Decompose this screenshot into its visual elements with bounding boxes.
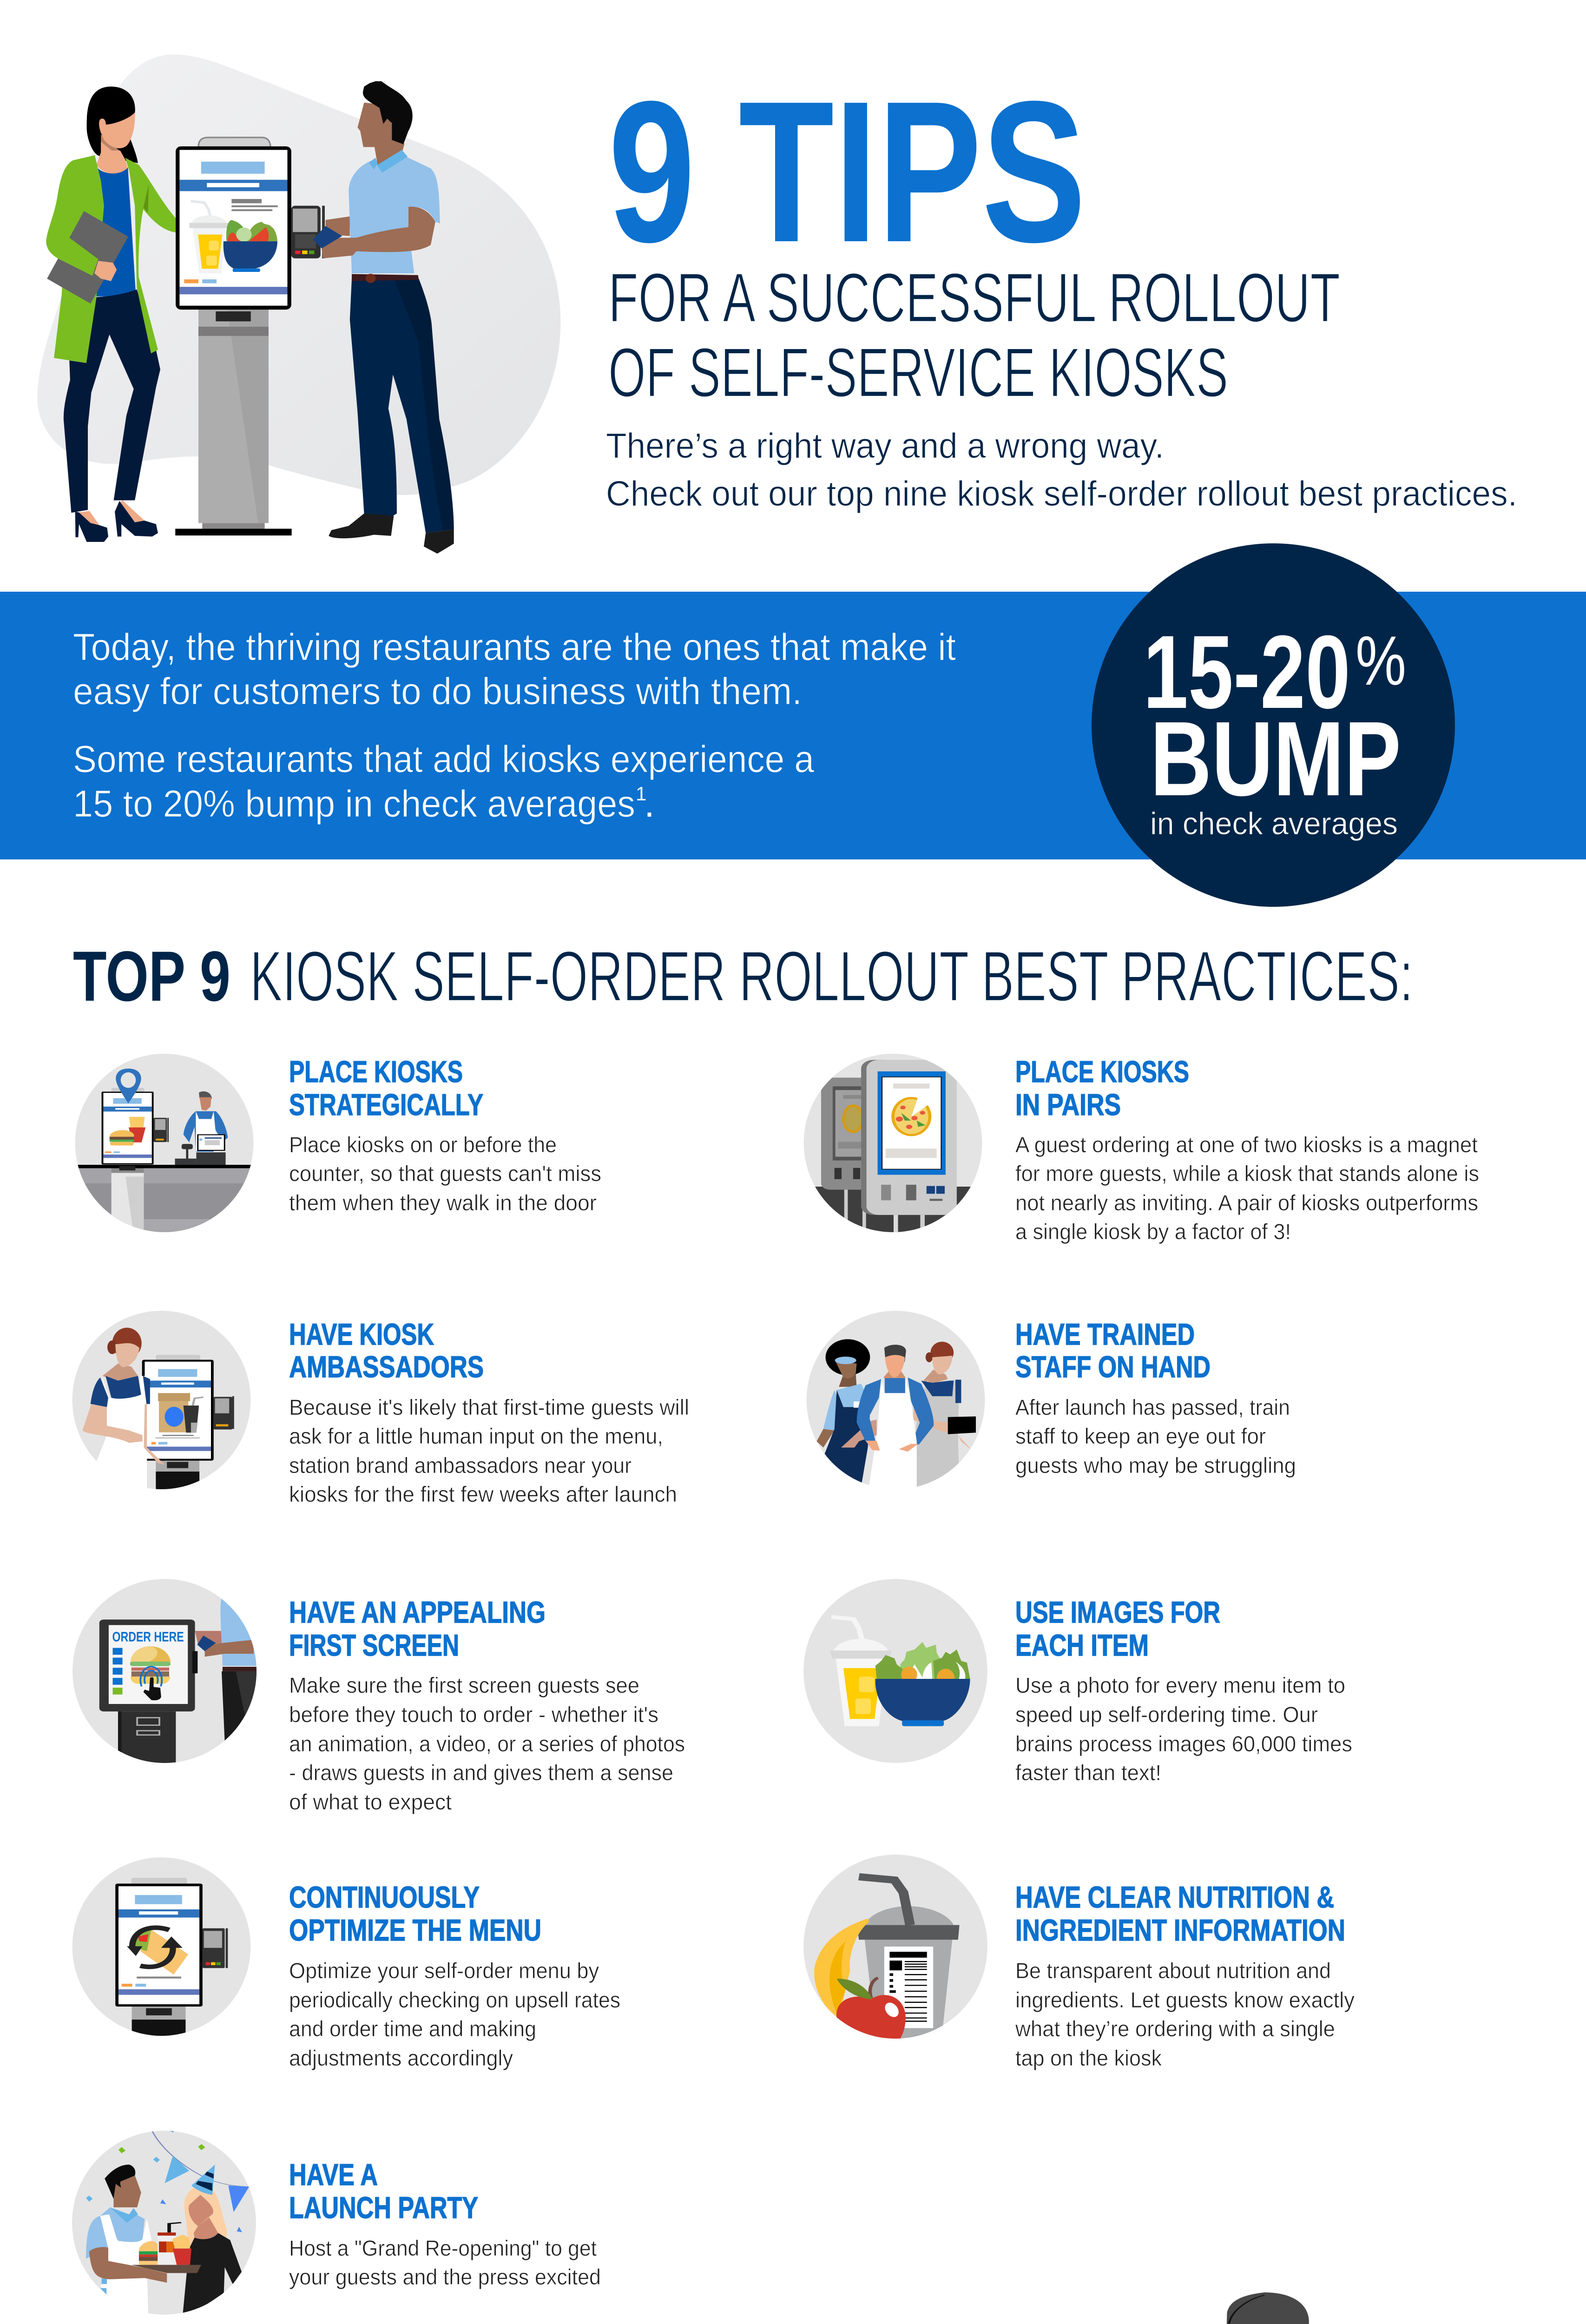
- text block: use images for each item: USE IMAGES FOR: [1015, 1595, 1220, 1629]
- text block: have trained staff on hand: staff to keep an eye out for: [1015, 1424, 1266, 1448]
- text block: continuously optimize the menu: adjustments accordingly: [289, 2046, 513, 2070]
- text block: place kiosks strategically: them when they walk in the door: [289, 1190, 597, 1215]
- icon: drink and salad: [803, 1579, 987, 1763]
- icon: optimize the menu: [72, 1857, 251, 2039]
- text block: continuously optimize the menu: and order time and making: [289, 2016, 536, 2041]
- headline: 9 tips: 9 TIPS: [608, 59, 1086, 284]
- text block: use images for each item: brains process images 60,000 times: [1015, 1731, 1352, 1756]
- text block: have a launch party: Host a "Grand Re-opening" to get: [289, 2236, 597, 2260]
- section heading: TOP 9: [73, 937, 230, 1016]
- text block: have trained staff on hand: After launch has passed, train: [1015, 1395, 1290, 1419]
- text block: continuously optimize the menu: periodically checking on upsell rates: [289, 1987, 620, 2012]
- text block: use images for each item: Use a photo for every menu item to: [1015, 1673, 1345, 1697]
- callout: 15-20% bump circle: %: [1356, 621, 1406, 700]
- text block: have a launch party: your guests and the press excited: [289, 2265, 601, 2289]
- payment card reader: [291, 206, 325, 258]
- callout: 15-20% bump circle: [1092, 543, 1455, 907]
- self-order kiosk: [175, 138, 292, 535]
- text block: have an appealing first screen: FIRST SCREEN: [289, 1628, 459, 1662]
- intro text: [606, 426, 1517, 514]
- subtitle: [608, 258, 1340, 411]
- intro text: Check out our top nine kiosk self-order rollout best practices.: [606, 474, 1517, 514]
- icon: launch party: [72, 2130, 256, 2317]
- text block: have kiosk ambassadors: kiosks for the first few weeks after launch: [289, 1482, 677, 1506]
- text block: have a launch party: [289, 2158, 601, 2289]
- band text: .: [644, 783, 655, 825]
- icon: appealing first screen: ORDER HERE: [112, 1629, 184, 1644]
- band text: easy for customers to do business with them.: [73, 670, 802, 713]
- text block: have clear nutrition and ingredient information: HAVE CLEAR NUTRITION &: [1015, 1880, 1334, 1914]
- text block: have an appealing first screen: an animation, a video, or a series of photos: [289, 1731, 685, 1756]
- icon: trained staff: [807, 1311, 985, 1494]
- text block: place kiosks in pairs: A guest ordering at one of two kiosks is a magnet: [1015, 1132, 1478, 1157]
- text block: have an appealing first screen: HAVE AN APPEALING: [289, 1595, 546, 1629]
- text block: place kiosks in pairs: PLACE KIOSKS: [1015, 1055, 1189, 1089]
- band text: Today, the thriving restaurants are the ones that make it: [73, 626, 956, 668]
- icon: place kiosks in pairs: [799, 1054, 986, 1235]
- icon: nutrition label on cup with fruit: [803, 1855, 987, 2042]
- text block: have a launch party: LAUNCH PARTY: [289, 2191, 478, 2225]
- title: [606, 59, 1517, 514]
- text block: have clear nutrition and ingredient information: INGREDIENT INFORMATION: [1015, 1913, 1345, 1947]
- band text: 1: [636, 783, 646, 805]
- text block: have trained staff on hand: HAVE TRAINED: [1015, 1317, 1195, 1351]
- text block: continuously optimize the menu: Optimize your self-order menu by: [289, 1958, 599, 1983]
- text block: have kiosk ambassadors: [289, 1317, 689, 1506]
- band text: [73, 626, 956, 825]
- text block: continuously optimize the menu: [289, 1880, 620, 2070]
- callout: 15-20% bump circle: 15-20: [1143, 614, 1350, 730]
- text block: have kiosk ambassadors: Because it's likely that first-time guests will: [289, 1395, 689, 1419]
- text block: place kiosks strategically: Place kiosks on or before the: [289, 1132, 557, 1157]
- text block: have kiosk ambassadors: HAVE KIOSK: [289, 1317, 434, 1351]
- text block: place kiosks strategically: STRATEGICALLY: [289, 1088, 483, 1122]
- text block: have an appealing first screen: - draws guests in and gives them a sense: [289, 1760, 673, 1785]
- text block: place kiosks in pairs: [1015, 1055, 1479, 1244]
- text block: place kiosks in pairs: IN PAIRS: [1015, 1088, 1121, 1122]
- text block: have kiosk ambassadors: AMBASSADORS: [289, 1350, 484, 1384]
- text block: use images for each item: [1015, 1595, 1352, 1785]
- panel: blue statistic band: [0, 592, 1586, 859]
- icon: appealing first screen: [72, 1579, 260, 1767]
- band text: Some restaurants that add kiosks experience a: [73, 738, 814, 780]
- callout: 15-20% bump circle: in check averages: [1150, 806, 1398, 841]
- text block: have clear nutrition and ingredient information: tap on the kiosk: [1015, 2046, 1162, 2070]
- text block: have trained staff on hand: [1015, 1317, 1296, 1478]
- text block: place kiosks in pairs: not nearly as inviting. A pair of kiosks outperforms: [1015, 1190, 1478, 1215]
- text block: have an appealing first screen: Make sure the first screen guests see: [289, 1673, 639, 1697]
- text block: have clear nutrition and ingredient information: what they’re ordering with a single: [1015, 2016, 1335, 2041]
- text block: place kiosks strategically: [289, 1055, 601, 1215]
- text block: have clear nutrition and ingredient information: ingredients. Let guests know exactly: [1015, 1987, 1355, 2012]
- text block: have clear nutrition and ingredient information: [1015, 1880, 1355, 2070]
- subtitle: OF SELF-SERVICE KIOSKS: [608, 333, 1228, 411]
- background blob: [37, 54, 560, 495]
- text block: use images for each item: faster than text!: [1015, 1760, 1161, 1785]
- text block: place kiosks in pairs: a single kiosk by a factor of 3!: [1015, 1219, 1291, 1244]
- intro text: There’s a right way and a wrong way.: [606, 426, 1164, 466]
- text block: have kiosk ambassadors: station brand ambassadors near your: [289, 1453, 632, 1478]
- woman with folder: [46, 86, 176, 542]
- text block: have trained staff on hand: guests who may be struggling: [1015, 1453, 1296, 1478]
- text block: have an appealing first screen: [289, 1595, 685, 1814]
- text block: have a launch party: HAVE A: [289, 2158, 378, 2192]
- text block: use images for each item: speed up self-ordering time. Our: [1015, 1702, 1318, 1727]
- callout: 15-20% bump circle: BUMP: [1150, 700, 1401, 818]
- text block: have an appealing first screen: before they touch to order - whether it's: [289, 1702, 658, 1727]
- text block: continuously optimize the menu: CONTINUOUSLY: [289, 1880, 480, 1914]
- text block: continuously optimize the menu: OPTIMIZE THE MENU: [289, 1913, 541, 1947]
- text block: have trained staff on hand: STAFF ON HAND: [1015, 1350, 1211, 1384]
- hero illustration: two people at a kiosk: [37, 54, 560, 554]
- text block: place kiosks strategically: PLACE KIOSKS: [289, 1055, 463, 1089]
- icon: place kiosks strategically: [75, 1054, 254, 1235]
- text block: place kiosks strategically: counter, so that guests can't miss: [289, 1161, 601, 1186]
- text block: place kiosks in pairs: for more guests, while a kiosk that stands alone is: [1015, 1161, 1479, 1186]
- illustration: support agent with headset: [1125, 2292, 1413, 2324]
- band text: 15 to 20% bump in check averages: [73, 783, 635, 825]
- text block: have an appealing first screen: of what to expect: [289, 1789, 452, 1814]
- text block: have kiosk ambassadors: ask for a little human input on the menu,: [289, 1424, 663, 1448]
- man paying with card: [313, 81, 454, 554]
- text block: use images for each item: EACH ITEM: [1015, 1628, 1149, 1662]
- text block: have clear nutrition and ingredient information: Be transparent about nutrition and: [1015, 1958, 1331, 1983]
- icon: kiosk ambassador: [72, 1311, 251, 1498]
